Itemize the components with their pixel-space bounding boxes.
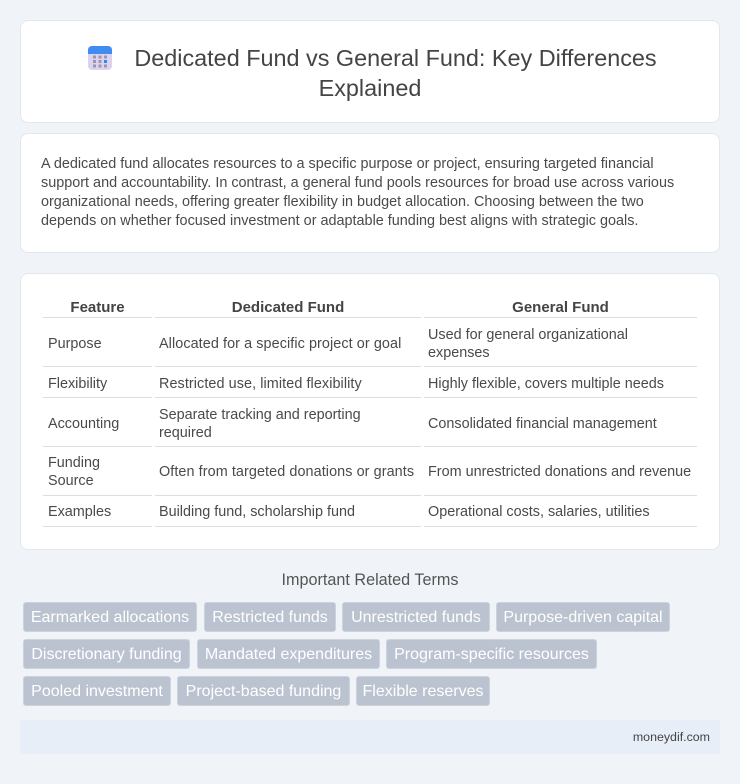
tag: Flexible reserves bbox=[363, 683, 483, 700]
table header: Feature bbox=[70, 299, 125, 316]
row: funding source: From unrestricted donations and revenue bbox=[428, 464, 691, 480]
row: flexibility bbox=[48, 376, 664, 392]
tag bbox=[204, 602, 336, 632]
icon: calendar bbox=[88, 46, 112, 70]
row: flexibility: Flexibility bbox=[48, 376, 107, 392]
tag: Program-specific resources bbox=[394, 646, 589, 663]
text block: intro paragraph: depends on whether focused investment or adaptable funding best aligns with strategic goals. bbox=[41, 213, 638, 229]
row: examples bbox=[48, 504, 650, 520]
row: funding source: Funding bbox=[48, 455, 100, 471]
row: accounting: Consolidated financial management bbox=[428, 416, 657, 432]
text block: intro paragraph: A dedicated fund allocates resources to a specific purpose or project, ensuring targeted financial bbox=[41, 156, 654, 172]
panel: title card bbox=[20, 20, 720, 123]
row: accounting bbox=[48, 407, 657, 441]
tag: Earmarked allocations bbox=[31, 609, 189, 626]
row: funding source: Often from targeted donations or grants bbox=[159, 464, 414, 480]
tag group: related terms bbox=[23, 602, 670, 706]
row: purpose: Used for general organizational bbox=[428, 327, 628, 343]
text block: intro paragraph: organizational needs, offering greater flexibility in budget allocation. Choosing between the two bbox=[41, 194, 644, 210]
table header: General Fund bbox=[512, 299, 609, 316]
row: purpose: expenses bbox=[428, 345, 490, 361]
panel: intro text bbox=[20, 133, 720, 253]
footer text: source: moneydif.com bbox=[633, 730, 710, 744]
row: funding source bbox=[48, 455, 691, 489]
row: funding source: Source bbox=[48, 473, 94, 489]
heading: title: Dedicated Fund vs General Fund: Key Differences bbox=[134, 45, 657, 71]
tag: Pooled investment bbox=[31, 683, 163, 700]
row: examples: Operational costs, salaries, utilities bbox=[428, 504, 650, 520]
tag: Project-based funding bbox=[186, 683, 341, 700]
row: flexibility: Restricted use, limited flexibility bbox=[159, 376, 362, 392]
heading: title bbox=[134, 45, 657, 101]
text block: intro paragraph bbox=[41, 156, 674, 229]
row: accounting: required bbox=[159, 425, 212, 441]
tag bbox=[23, 639, 190, 669]
row: accounting: Separate tracking and reporting bbox=[159, 407, 361, 423]
row: examples: Building fund, scholarship fund bbox=[159, 504, 355, 520]
tag bbox=[386, 639, 597, 669]
tag: Restricted funds bbox=[212, 609, 328, 626]
row: accounting: Accounting bbox=[48, 416, 119, 432]
tag bbox=[496, 602, 670, 632]
row: examples: Examples bbox=[48, 504, 111, 520]
panel: comparison table bbox=[20, 273, 720, 550]
row: flexibility: Highly flexible, covers multiple needs bbox=[428, 376, 664, 392]
table header: Dedicated Fund bbox=[232, 299, 344, 316]
tag bbox=[197, 639, 380, 669]
text block: intro paragraph: support and accountability. In contrast, a general fund pools resources for broad use across various bbox=[41, 175, 674, 191]
row: purpose: Purpose bbox=[48, 336, 102, 352]
tag bbox=[23, 602, 197, 632]
tag bbox=[342, 602, 490, 632]
tag: Purpose-driven capital bbox=[503, 609, 663, 626]
tag: Discretionary funding bbox=[31, 646, 182, 663]
tag bbox=[356, 676, 490, 706]
tag: Unrestricted funds bbox=[351, 609, 481, 626]
tag bbox=[23, 676, 171, 706]
tag: Mandated expenditures bbox=[205, 646, 372, 663]
heading: title: Explained bbox=[319, 75, 421, 101]
row: purpose bbox=[48, 327, 628, 361]
heading: important related terms: Important Related Terms bbox=[282, 571, 458, 589]
footer bar bbox=[20, 720, 720, 754]
tag bbox=[177, 676, 350, 706]
table header bbox=[70, 299, 609, 316]
row: purpose: Allocated for a specific project or goal bbox=[159, 336, 401, 352]
